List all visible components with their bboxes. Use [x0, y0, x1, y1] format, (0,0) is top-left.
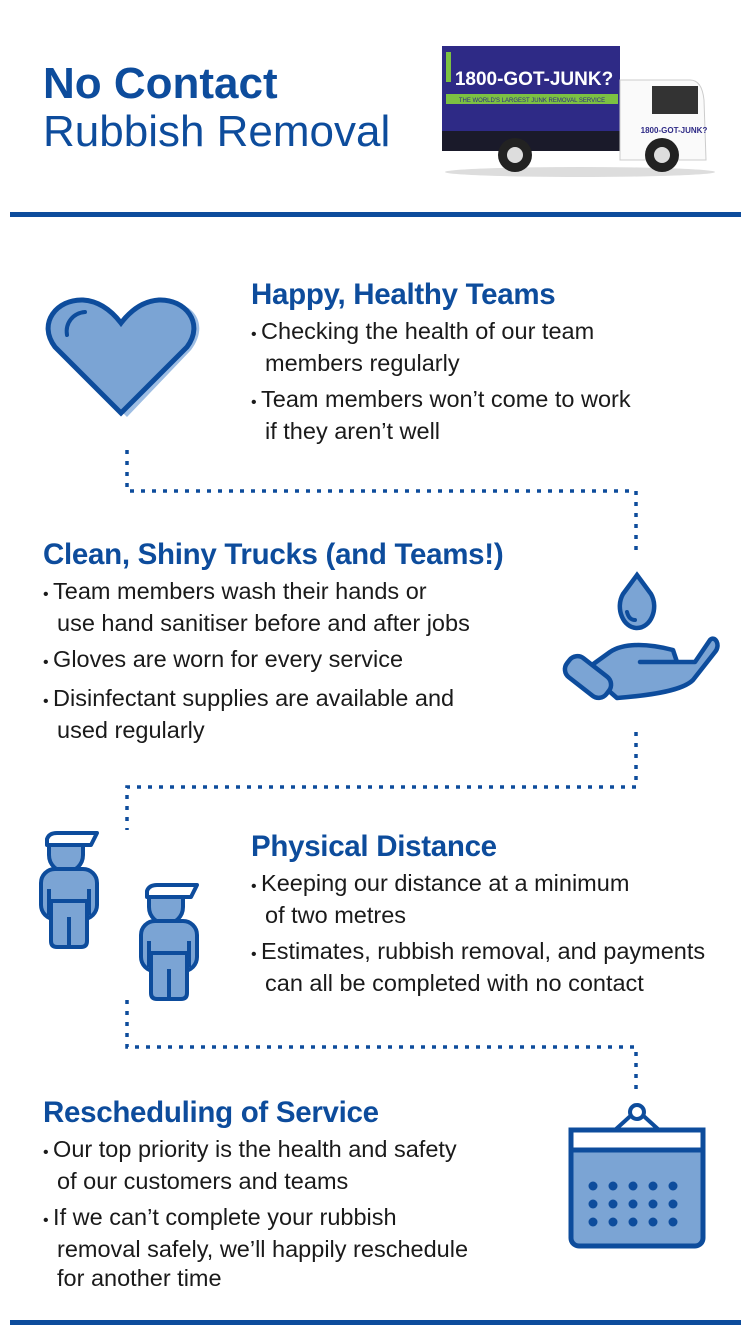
section: happy healthy teams [251, 278, 631, 444]
truck image [442, 46, 715, 177]
section: clean trucks: used regularly [57, 717, 205, 743]
section: rescheduling: If we can’t complete your rubbish [53, 1204, 397, 1230]
icon: two people [39, 831, 199, 1001]
section: rescheduling: of our customers and teams [57, 1168, 348, 1194]
section: physical distance: Keeping our distance at a minimum [261, 870, 629, 896]
section: clean trucks: Clean, Shiny Trucks (and Teams!) [43, 538, 503, 571]
truck image: THE WORLD'S LARGEST JUNK REMOVAL SERVICE [459, 98, 605, 104]
title: No Contact [43, 59, 278, 108]
section: happy healthy teams: if they aren’t well [265, 418, 440, 444]
section: physical distance: Physical Distance [251, 830, 497, 863]
section: happy healthy teams: members regularly [265, 350, 460, 376]
section: happy healthy teams: Checking the health of our team [261, 318, 594, 344]
section: rescheduling: Our top priority is the health and safety [53, 1136, 457, 1162]
section: clean trucks [43, 538, 503, 743]
section: clean trucks: Disinfectant supplies are available and [53, 685, 454, 711]
section: rescheduling: Rescheduling of Service [43, 1096, 379, 1129]
truck image: 1800-GOT-JUNK? [641, 126, 707, 135]
icon: heart [46, 298, 200, 417]
section: rescheduling: for another time [57, 1265, 222, 1291]
title [43, 59, 390, 156]
section: rescheduling [43, 1096, 468, 1291]
section: physical distance: Estimates, rubbish removal, and payments [261, 938, 705, 964]
icon: hand with drop [562, 571, 720, 700]
section: clean trucks: use hand sanitiser before and after jobs [57, 610, 470, 636]
section: happy healthy teams: Happy, Healthy Teams [251, 278, 555, 311]
section: clean trucks: Team members wash their hands or [53, 578, 427, 604]
section: clean trucks: Gloves are worn for every service [53, 646, 403, 672]
section: rescheduling: removal safely, we’ll happily reschedule [57, 1236, 468, 1262]
icon: calendar [568, 1103, 706, 1248]
section: physical distance: of two metres [265, 902, 406, 928]
section: happy healthy teams: Team members won’t come to work [261, 386, 631, 412]
truck image: 1800-GOT-JUNK? [455, 69, 613, 90]
title: Rubbish Removal [43, 107, 390, 156]
section: physical distance: can all be completed with no contact [265, 970, 644, 996]
section: physical distance [251, 830, 705, 996]
